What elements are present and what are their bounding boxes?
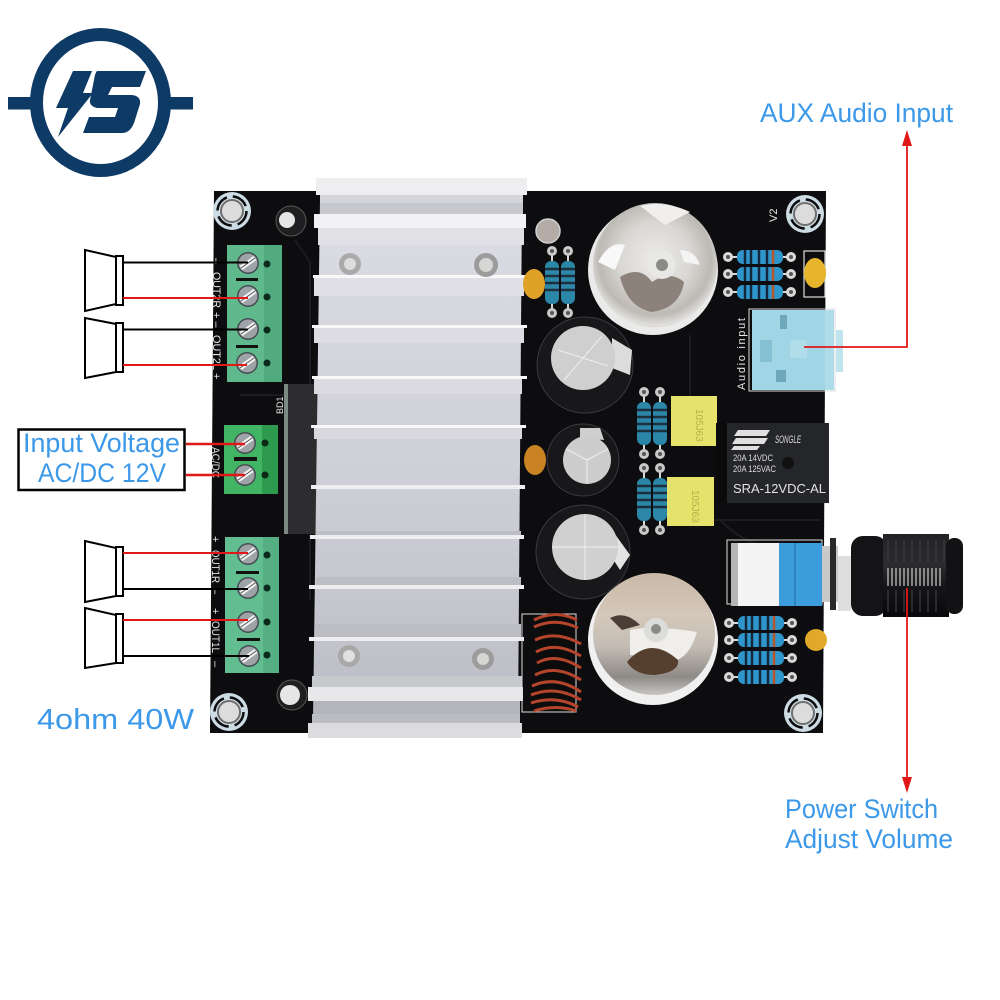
logo xyxy=(8,34,193,170)
silkscreen labels: + xyxy=(210,373,222,379)
input voltage box xyxy=(18,428,184,490)
silkscreen labels: OUT1L xyxy=(209,621,221,653)
silkscreen labels: – xyxy=(209,588,221,595)
relay: 20A 14VDC xyxy=(733,453,773,464)
arrow: power switch xyxy=(902,588,912,793)
silkscreen labels: AC/DC xyxy=(209,447,221,478)
silkscreen labels: OUT1R xyxy=(209,550,221,583)
speaker: bottom 2 xyxy=(85,608,123,668)
label: power switch and volume xyxy=(785,794,953,854)
input voltage box: AC/DC 12V xyxy=(38,458,166,488)
relay xyxy=(716,423,829,503)
speaker: top 2 xyxy=(85,318,123,378)
ceramic capacitors xyxy=(523,251,827,651)
input voltage wires xyxy=(186,444,245,475)
silkscreen labels: + – xyxy=(210,312,222,328)
audio jack xyxy=(749,309,843,391)
label: power switch and volume: Power Switch xyxy=(785,794,938,824)
speaker: bottom 1 xyxy=(85,541,123,602)
volume potentiometer xyxy=(727,538,851,611)
transistor block xyxy=(284,384,317,534)
heatsink screws xyxy=(338,253,498,670)
mounting holes xyxy=(210,192,824,732)
speaker spec label: 4ohm 40W xyxy=(37,704,195,736)
silkscreen labels: OUT2L xyxy=(210,335,222,370)
volume knob xyxy=(851,534,963,617)
label: AUX audio input: AUX Audio Input xyxy=(760,98,953,128)
label: power switch and volume: Adjust Volume xyxy=(785,824,953,854)
silkscreen labels: – xyxy=(209,661,221,668)
silkscreen labels xyxy=(209,209,780,668)
relay: SRA-12VDC-AL xyxy=(733,481,826,496)
electrolytic capacitors xyxy=(536,317,633,599)
silkscreen labels: – xyxy=(210,258,222,265)
film capacitors: 105J63 xyxy=(693,409,704,442)
film capacitors: 105J63 xyxy=(689,490,700,523)
silkscreen labels: Audio input xyxy=(736,318,748,390)
inductor coil xyxy=(522,614,581,712)
silkscreen labels: V2 xyxy=(768,209,780,222)
relay: 20A 125VAC xyxy=(733,464,776,475)
terminal block: input xyxy=(224,425,278,494)
heatsink xyxy=(308,178,527,738)
speaker: top 1 xyxy=(85,250,123,311)
vacuum tube: bottom xyxy=(588,573,718,705)
vacuum tube: top xyxy=(588,203,718,335)
silkscreen labels: OUT2R xyxy=(210,272,222,308)
resistors xyxy=(545,246,797,684)
arrow: AUX audio input xyxy=(804,130,912,347)
upper fins xyxy=(311,275,527,439)
speaker wires xyxy=(123,262,249,656)
silkscreen labels: BD1 xyxy=(275,396,285,414)
terminal block: bottom xyxy=(225,537,279,673)
silkscreen labels: + xyxy=(209,608,221,614)
input voltage box: Input Voltage xyxy=(23,428,180,458)
circuit board xyxy=(209,191,826,733)
lower fins xyxy=(309,485,525,641)
relay: SONGLE xyxy=(775,434,801,446)
small capacitors xyxy=(276,206,560,710)
terminal block: top xyxy=(227,245,282,382)
film capacitors xyxy=(667,396,717,526)
silkscreen labels: + xyxy=(209,536,221,542)
